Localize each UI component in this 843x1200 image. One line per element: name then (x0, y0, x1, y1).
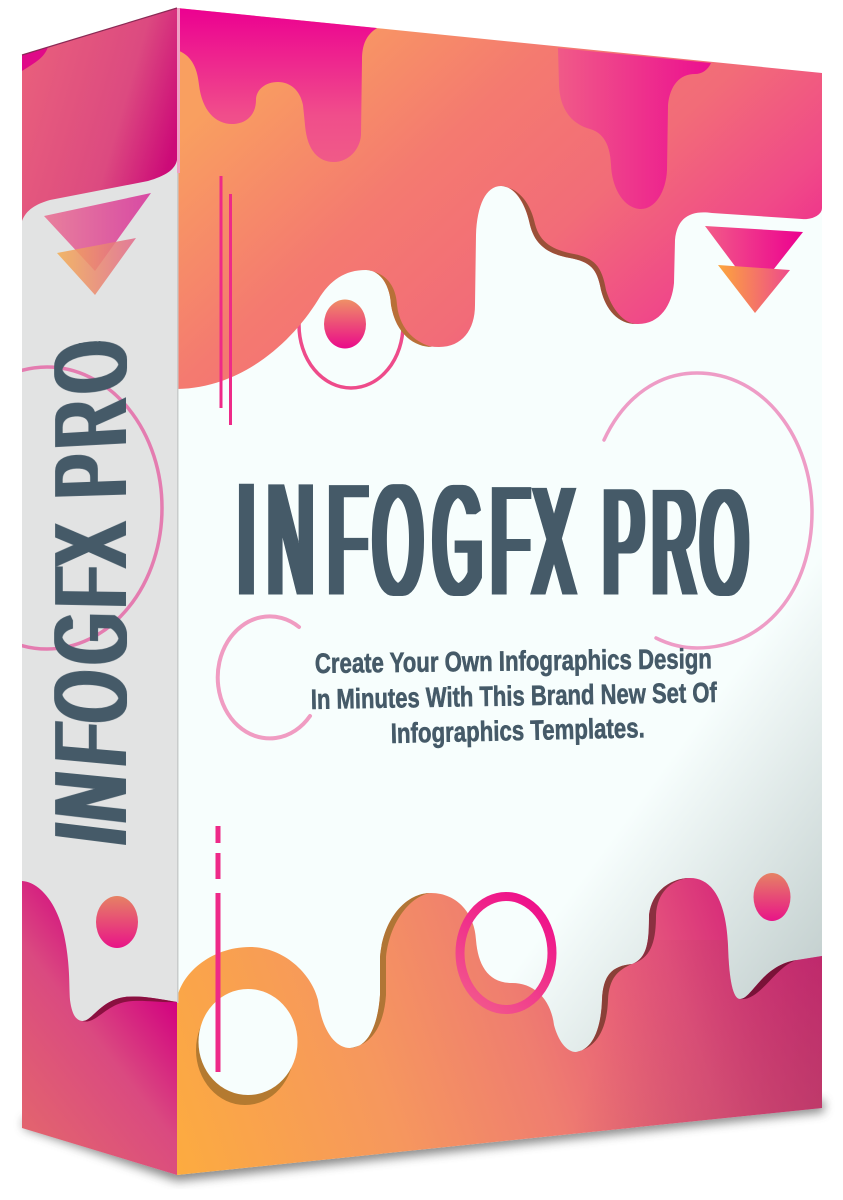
side wave edge shadow (82, 996, 177, 1022)
title: P (603, 457, 644, 627)
bottom wave edge shadows (350, 878, 797, 1052)
front panel (177, 8, 822, 1175)
circular cut-out (196, 989, 298, 1105)
side top edge (22, 8, 177, 55)
title: O (701, 459, 748, 627)
side dot (96, 896, 138, 948)
dot inside ring (324, 300, 366, 348)
top wave magenta drip left (177, 8, 377, 162)
side title: INFOGFX PRO (34, 322, 143, 844)
front triangle small (718, 265, 790, 313)
side bottom wave (22, 881, 177, 1175)
box ground shadow (24, 1100, 824, 1181)
title: N (268, 450, 314, 629)
title: X (533, 455, 575, 629)
subtitle: Infographics Templates. (390, 712, 645, 749)
fold highlight (177, 8, 180, 1003)
ring behind top wave (299, 262, 403, 388)
top wave edge shadows (366, 186, 636, 347)
subtitle: Create Your Own Infographics Design (315, 643, 712, 679)
side ring (22, 365, 164, 651)
top wave (177, 8, 822, 389)
title: I (238, 449, 255, 629)
large ring right (604, 373, 812, 648)
top wave magenta drip right (558, 48, 711, 209)
bottom right dot (754, 873, 790, 921)
title: O (373, 453, 423, 629)
small ring left (218, 616, 310, 738)
front triangle large (705, 226, 803, 293)
title: F (328, 450, 367, 629)
vertical accent lines (221, 176, 230, 425)
side top wave (22, 8, 177, 221)
title: G (433, 454, 482, 629)
left side panel (22, 7, 177, 1175)
side triangle small (57, 238, 136, 295)
subtitle (311, 643, 718, 749)
subtitle: In Minutes With This Brand New Set Of (311, 677, 718, 715)
bottom ring (460, 896, 552, 1010)
title: R (652, 457, 696, 627)
side corner accent (22, 47, 48, 71)
bottom wave (177, 878, 822, 1175)
dashed vertical line (216, 826, 220, 1072)
title (238, 449, 748, 629)
side triangle large (44, 193, 151, 271)
title: F (491, 454, 529, 629)
